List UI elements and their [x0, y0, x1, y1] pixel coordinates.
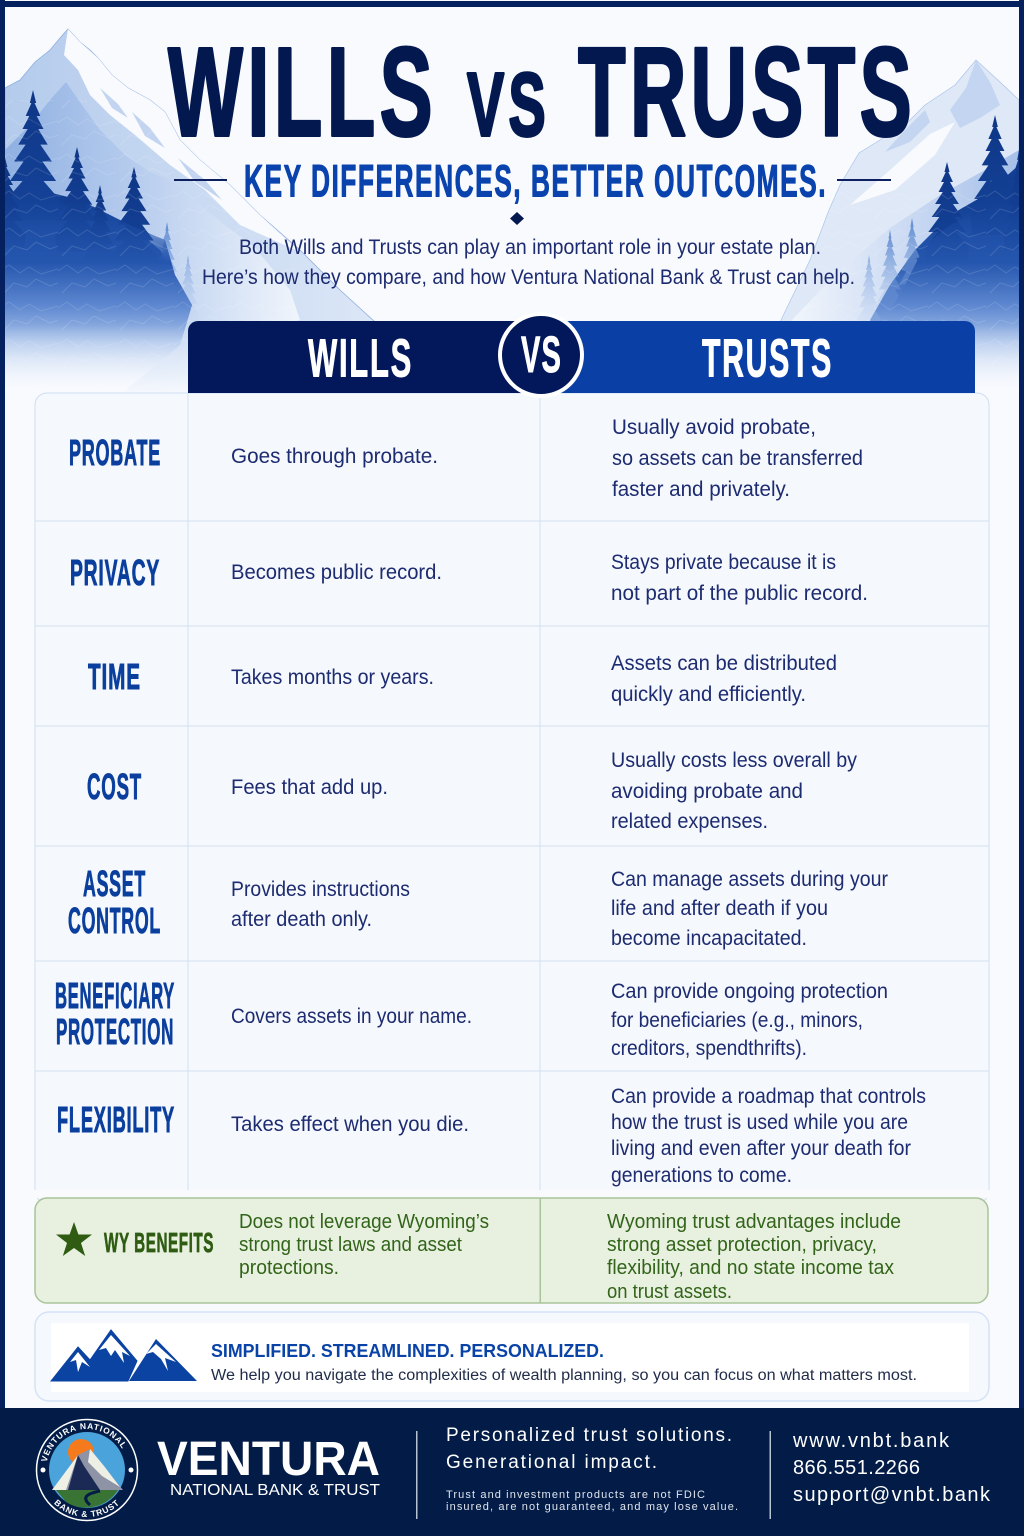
footer message: insured, are not guaranteed, and may lose value. — [446, 1501, 738, 1513]
row: asset control: Can manage assets during your — [611, 868, 888, 891]
row: probate: so assets can be transferred — [612, 447, 863, 470]
row: cost: COST — [87, 766, 142, 807]
title: VS — [467, 56, 550, 156]
intro text: Here’s how they compare, and how Ventura National Bank & Trust can help. — [202, 266, 855, 289]
footer message: Trust and investment products are not FDIC — [446, 1489, 705, 1501]
row: flexibility: Takes effect when you die. — [231, 1113, 469, 1136]
row: time: TIME — [88, 656, 141, 697]
table body — [35, 393, 989, 1203]
row: asset control: after death only. — [231, 908, 372, 931]
intro text: Both Wills and Trusts can play an important role in your estate plan. — [239, 236, 821, 259]
gap between table and green panel — [5, 1190, 1019, 1198]
brand name: NATIONAL BANK & TRUST — [170, 1482, 380, 1499]
row: cost — [87, 749, 857, 833]
logo badge: VENTURA NATIONAL — [41, 1423, 126, 1461]
wills wyoming text — [239, 1211, 489, 1279]
vs badge — [500, 314, 582, 396]
illustration: left mountain and pine trees — [0, 29, 375, 395]
wy benefits label: WY BENEFITS — [104, 1227, 214, 1258]
contact details: 866.551.2266 — [793, 1457, 920, 1479]
trusts wyoming text: on trust assets. — [607, 1281, 732, 1303]
title: WILLS — [168, 22, 437, 162]
title — [168, 22, 916, 162]
icon: star — [56, 1222, 92, 1256]
row: asset control: become incapacitated. — [611, 927, 807, 950]
row: time: Assets can be distributed — [611, 652, 837, 675]
row: beneficiary protection — [55, 975, 888, 1060]
row: probate: faster and privately. — [612, 478, 790, 501]
row: cost: Usually costs less overall by — [611, 749, 857, 772]
row: asset control: Provides instructions — [231, 878, 410, 901]
row: cost: Fees that add up. — [231, 776, 388, 799]
trusts wyoming text: strong asset protection, privacy, — [607, 1234, 877, 1256]
row: beneficiary protection: Can provide ongoing protection — [611, 980, 888, 1003]
diamond ornament — [510, 212, 524, 225]
intro text — [202, 236, 855, 289]
row: time — [88, 652, 837, 706]
panel: simplified streamlined personalized — [35, 1312, 989, 1401]
row: beneficiary protection: for beneficiaries (e.g., minors, — [611, 1009, 863, 1032]
scenery fade into page — [5, 325, 1019, 400]
wills wyoming text: protections. — [239, 1257, 339, 1279]
contact details: support@vnbt.bank — [793, 1484, 991, 1506]
column header: trusts: TRUSTS — [702, 328, 833, 388]
row: privacy: Becomes public record. — [231, 561, 442, 584]
row: cost: avoiding probate and — [611, 780, 803, 803]
row: probate — [69, 416, 863, 501]
row: beneficiary protection: Covers assets in your name. — [231, 1005, 472, 1028]
row: probate: Usually avoid probate, — [612, 416, 816, 439]
logo badge — [36, 1418, 138, 1522]
tagline: SIMPLIFIED. STREAMLINED. PERSONALIZED. — [211, 1341, 604, 1361]
logo badge: BANK & TRUST — [54, 1499, 118, 1518]
footer message — [446, 1425, 738, 1513]
row: beneficiary protection: PROTECTION — [56, 1011, 174, 1052]
row: cost: related expenses. — [611, 810, 768, 833]
row: asset control: life and after death if you — [611, 897, 828, 920]
row: beneficiary protection: BENEFICIARY — [55, 975, 175, 1016]
vs badge: VS — [521, 326, 562, 383]
row: time: Takes months or years. — [231, 666, 434, 689]
row: time: quickly and efficiently. — [611, 683, 806, 706]
row: privacy: Stays private because it is — [611, 551, 836, 574]
trusts wyoming text: Wyoming trust advantages include — [607, 1211, 901, 1233]
row: flexibility: Can provide a roadmap that controls — [611, 1085, 926, 1108]
tagline description: We help you navigate the complexities of wealth planning, so you can focus on what matters most. — [211, 1367, 917, 1384]
row: asset control: CONTROL — [68, 900, 161, 941]
trusts wyoming text — [607, 1211, 901, 1303]
contact details: www.vnbt.bank — [792, 1430, 950, 1452]
row: probate: Goes through probate. — [231, 445, 438, 468]
row: privacy: not part of the public record. — [611, 582, 868, 605]
illustration: right mountain and pine trees — [780, 60, 1024, 395]
row: beneficiary protection: creditors, spendthrifts). — [611, 1037, 807, 1060]
contact details — [792, 1430, 991, 1506]
row: flexibility: how the trust is used while you are — [611, 1111, 908, 1134]
footer message: Personalized trust solutions. — [446, 1425, 732, 1446]
footer — [0, 1408, 1024, 1536]
brand name: VENTURA — [157, 1433, 380, 1486]
icon: mountains — [51, 1330, 197, 1381]
column header: trusts — [540, 321, 975, 393]
row: flexibility: FLEXIBILITY — [57, 1099, 175, 1140]
row: privacy — [70, 551, 868, 605]
row: asset control: ASSET — [83, 863, 146, 904]
wills wyoming text: Does not leverage Wyoming’s — [239, 1211, 489, 1233]
row: flexibility: generations to come. — [611, 1164, 792, 1187]
row: flexibility: living and even after your death for — [611, 1137, 911, 1160]
panel: wyoming benefits — [35, 1198, 988, 1303]
footer message: Generational impact. — [446, 1452, 657, 1473]
wills wyoming text: strong trust laws and asset — [239, 1234, 462, 1256]
column header: wills — [188, 321, 545, 393]
row: flexibility — [57, 1085, 926, 1187]
row: asset control — [68, 863, 888, 950]
column header: wills: WILLS — [308, 328, 413, 388]
row: probate: PROBATE — [69, 432, 161, 473]
trusts wyoming text: flexibility, and no state income tax — [607, 1257, 894, 1279]
row: privacy: PRIVACY — [70, 552, 160, 593]
